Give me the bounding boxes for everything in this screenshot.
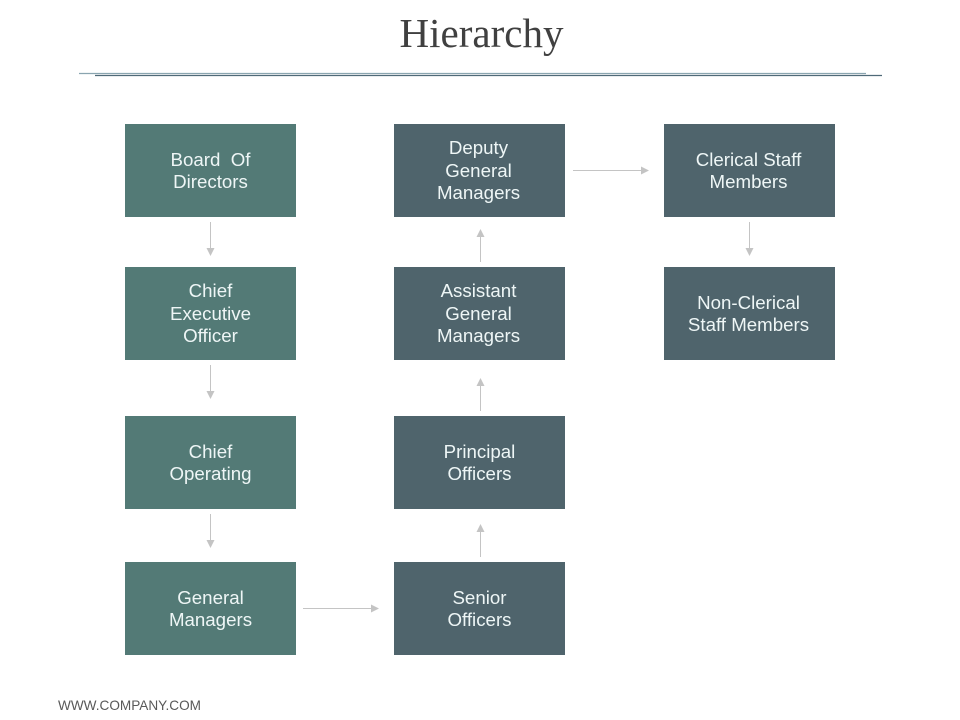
box: Principal Officers <box>394 416 565 509</box>
box: Assistant General Managers <box>394 267 565 360</box>
box: Senior Officers: Officers <box>447 609 512 630</box>
box: Deputy General Managers: Deputy <box>449 137 508 158</box>
arrow: senior officers to principal officers <box>476 524 484 557</box>
box: General Managers: Managers <box>169 609 252 630</box>
box: Chief Operating: Chief <box>189 441 232 462</box>
box: Non-Clerical Staff Members: Non-Clerical <box>697 292 800 313</box>
box: Board Of Directors <box>125 124 296 217</box>
box: Senior Officers: Senior <box>452 587 506 608</box>
arrow: CEO to COO <box>206 365 214 399</box>
box: Chief Operating: Operating <box>169 463 252 484</box>
box: Board Of Directors: Board Of <box>170 149 250 170</box>
box: Assistant General Managers: General <box>445 303 512 324</box>
box: Chief Executive Officer <box>125 267 296 360</box>
arrow: general managers to senior officers <box>303 604 379 612</box>
footer url: WWW.COMPANY.COM <box>58 698 201 713</box>
box: Deputy General Managers: Managers <box>437 182 520 203</box>
box: Clerical Staff Members: Clerical Staff <box>696 149 801 170</box>
box: Chief Operating <box>125 416 296 509</box>
box: Chief Executive Officer: Officer <box>183 325 238 346</box>
arrow: principal officers to assistant GM <box>476 378 484 411</box>
box: Non-Clerical Staff Members: Staff Members <box>688 314 809 335</box>
title: Hierarchy <box>400 10 563 56</box>
box: Chief Executive Officer: Executive <box>170 303 251 324</box>
box: Assistant General Managers: Managers <box>437 325 520 346</box>
box: Clerical Staff Members <box>664 124 835 217</box>
box: Principal Officers: Officers <box>447 463 512 484</box>
box: General Managers <box>125 562 296 655</box>
box: Assistant General Managers: Assistant <box>441 280 516 301</box>
box: Board Of Directors: Directors <box>173 171 248 192</box>
box: Non-Clerical Staff Members <box>664 267 835 360</box>
box: Deputy General Managers: General <box>445 160 512 181</box>
arrow: board to CEO <box>206 222 214 256</box>
box: Clerical Staff Members: Members <box>710 171 787 192</box>
box: Chief Executive Officer: Chief <box>189 280 232 301</box>
arrow: clerical to non-clerical <box>746 222 754 256</box>
box: Deputy General Managers <box>394 124 565 217</box>
box: Senior Officers <box>394 562 565 655</box>
box: General Managers: General <box>177 587 244 608</box>
box: Principal Officers: Principal <box>444 441 515 462</box>
arrow: deputy GM to clerical staff <box>573 166 649 174</box>
arrow: assistant GM to deputy GM <box>476 229 484 262</box>
arrow: COO to general managers <box>206 514 214 548</box>
